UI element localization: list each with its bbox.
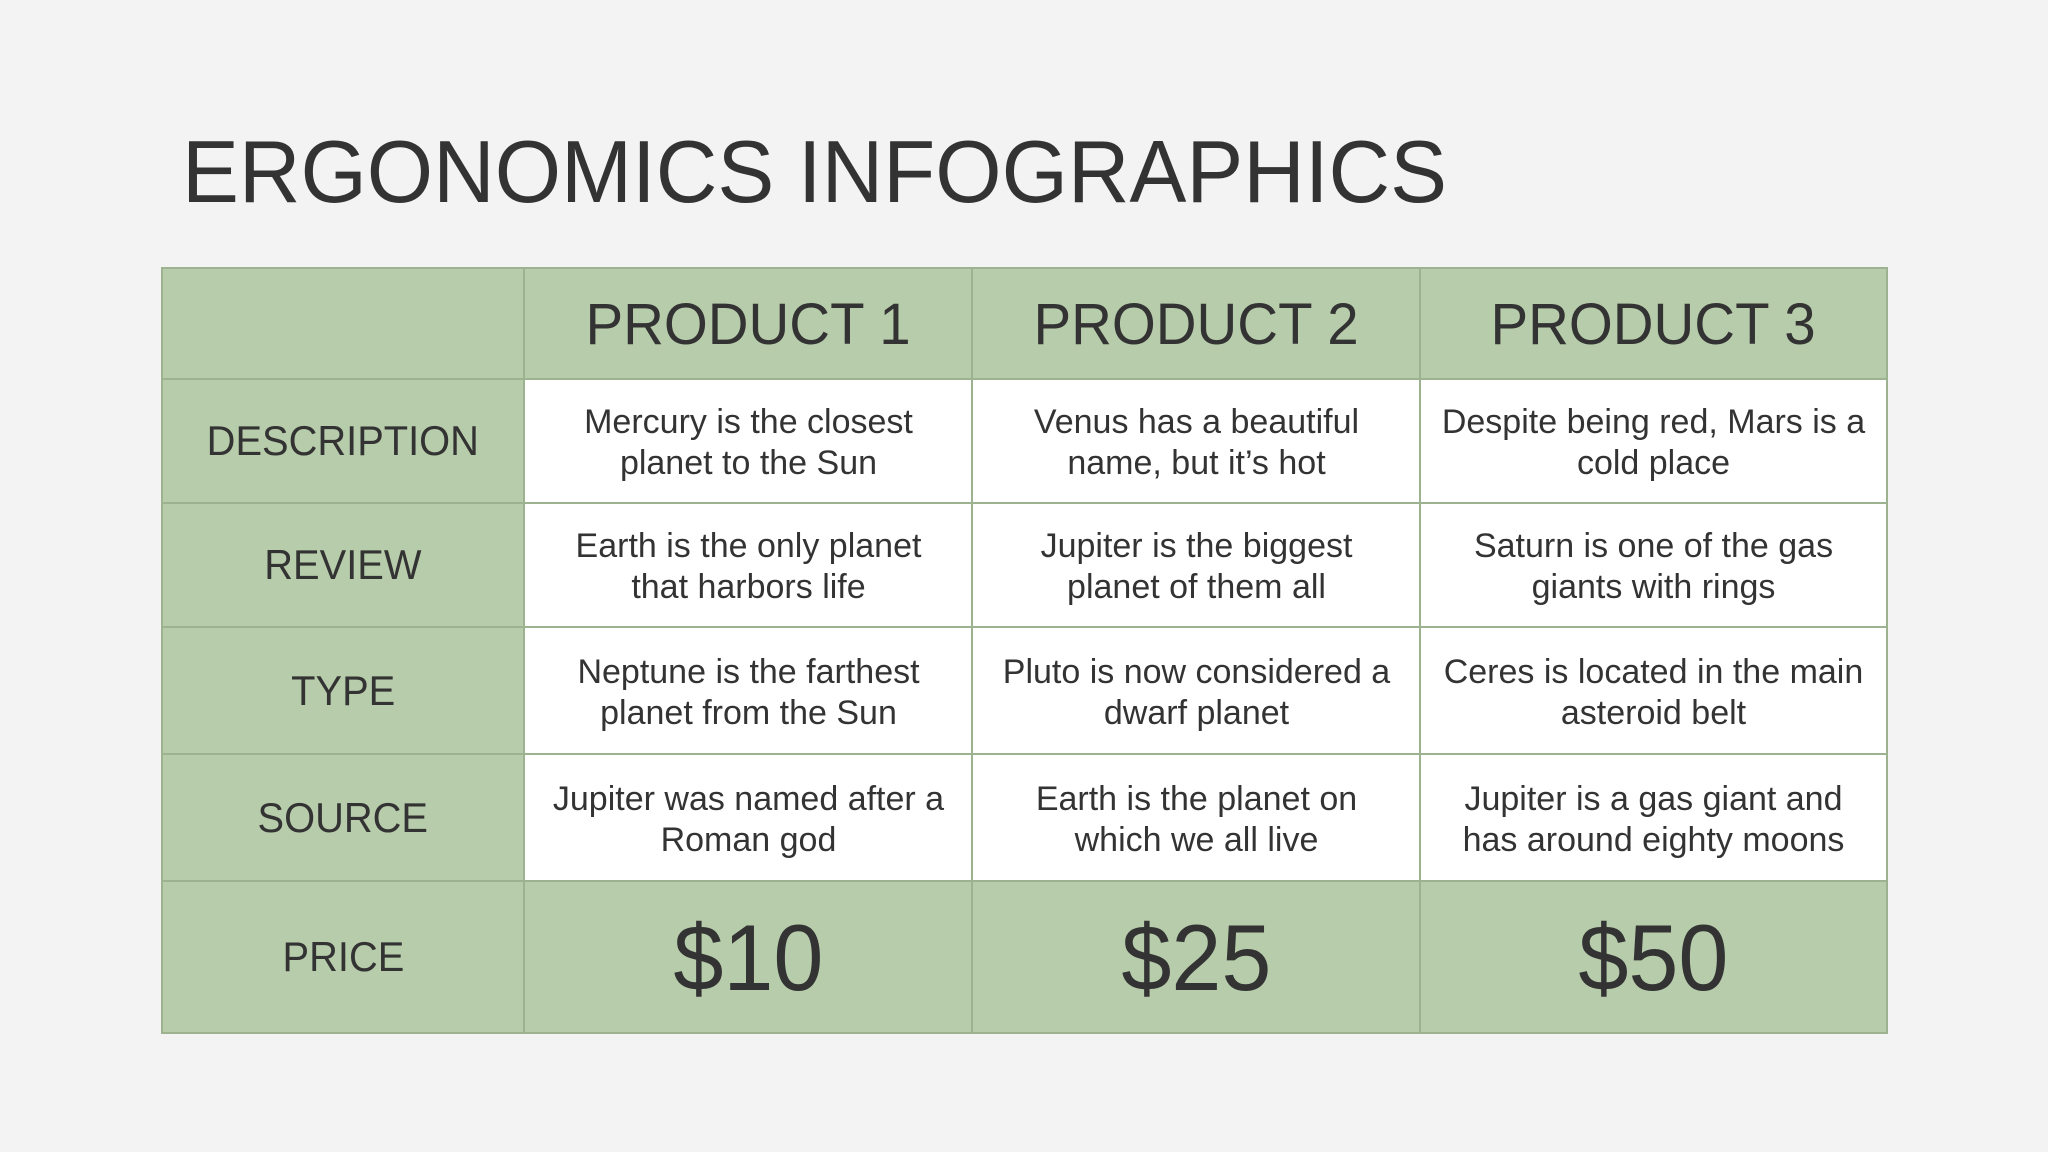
cell: product 2 description: name, but it’s hot — [1067, 444, 1326, 482]
cell: product 2 type: Pluto is now considered a — [1003, 652, 1390, 690]
row label: review: REVIEW — [264, 541, 422, 588]
cell: product 1 type — [523, 626, 974, 755]
price: product 1: $10 — [673, 905, 824, 1010]
cell: product 3 source: has around eighty moons — [1463, 820, 1844, 858]
cell: product 3 type — [1419, 626, 1888, 755]
cell: product 1 review — [523, 502, 974, 628]
cell: product 1 source: Jupiter was named after a — [553, 780, 944, 818]
row label: price: PRICE — [282, 933, 404, 980]
cell: product 3 source — [1419, 753, 1888, 882]
column heading: product 3 — [1419, 267, 1888, 380]
row label: description: DESCRIPTION — [207, 417, 479, 464]
cell: product 1 description: Mercury is the closest — [584, 403, 913, 441]
cell: product 3 review — [1419, 502, 1888, 628]
cell: product 3 source: Jupiter is a gas giant and — [1464, 780, 1843, 818]
cell: product 1 type: Neptune is the farthest — [577, 652, 920, 690]
cell: product 2 description: Venus has a beautiful — [1034, 403, 1359, 441]
column heading: product 2 — [971, 267, 1422, 380]
cell: product 2 type: dwarf planet — [1104, 694, 1289, 732]
row label: description — [161, 378, 525, 504]
cell: product 2 type — [971, 626, 1422, 755]
cell: product 3 description: Despite being red, Mars is a — [1442, 403, 1865, 441]
column heading: product 1 — [523, 267, 974, 380]
cell: product 2 review — [971, 502, 1422, 628]
cell: product 2 review: Jupiter is the biggest — [1041, 527, 1352, 565]
row label: type — [161, 626, 525, 755]
price: product 2: $25 — [1121, 905, 1272, 1010]
cell: product 2 review: planet of them all — [1067, 568, 1326, 606]
price: product 1 — [523, 880, 974, 1034]
cell: product 3 description: cold place — [1577, 444, 1730, 482]
cell: product 3 review: giants with rings — [1532, 568, 1775, 606]
price: product 3: $50 — [1578, 905, 1729, 1010]
cell: product 2 source: which we all live — [1075, 820, 1318, 858]
cell: product 3 type: Ceres is located in the main — [1444, 652, 1863, 690]
title: ERGONOMICS INFOGRAPHICS — [182, 122, 1447, 221]
cell: product 2 source: Earth is the planet on — [1036, 780, 1357, 818]
price: product 3 — [1419, 880, 1888, 1034]
cell: product 2 source — [971, 753, 1422, 882]
row label: review — [161, 502, 525, 628]
cell: product 1 type: planet from the Sun — [600, 694, 897, 732]
column heading: product 2: PRODUCT 2 — [1034, 292, 1359, 356]
cell: product 1 source: Roman god — [661, 820, 836, 858]
price: product 2 — [971, 880, 1422, 1034]
column heading: product 3: PRODUCT 3 — [1491, 292, 1816, 356]
cell: product 1 description: planet to the Sun — [620, 444, 877, 482]
cell: product 3 type: asteroid belt — [1561, 694, 1746, 732]
cell: product 3 review: Saturn is one of the gas — [1474, 527, 1833, 565]
column heading: product 1: PRODUCT 1 — [586, 292, 911, 356]
empty corner header cell — [161, 267, 525, 380]
row label: source — [161, 753, 525, 882]
row label: price — [161, 880, 525, 1034]
row label: type: TYPE — [291, 666, 395, 714]
row label: source: SOURCE — [258, 794, 428, 840]
cell: product 1 description — [523, 378, 974, 504]
cell: product 2 description — [971, 378, 1422, 504]
cell: product 1 review: that harbors life — [631, 568, 866, 606]
cell: product 1 review: Earth is the only planet — [576, 527, 921, 565]
cell: product 1 source — [523, 753, 974, 882]
cell: product 3 description — [1419, 378, 1888, 504]
